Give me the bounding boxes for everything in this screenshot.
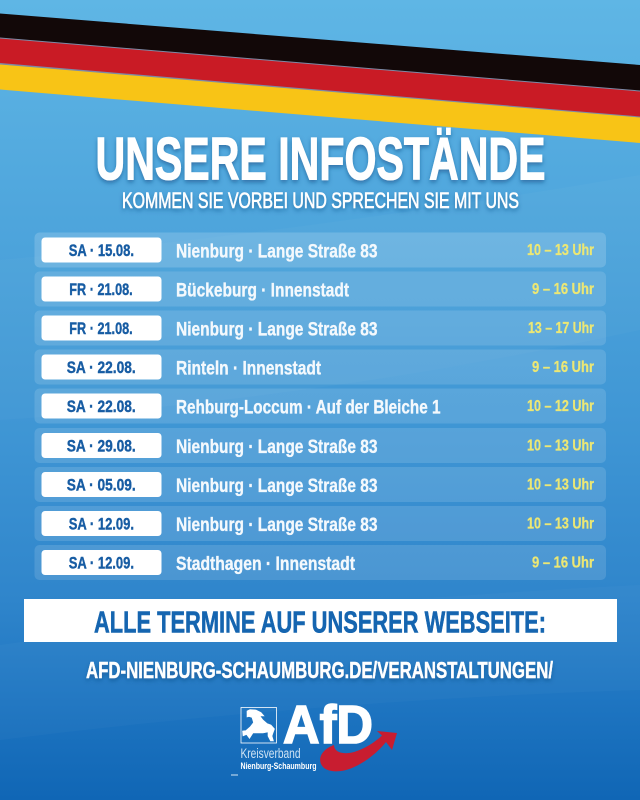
row: SA 05.09. Nienburg: Nienburg · Lange Straße 83	[176, 476, 378, 497]
logo region name: Nienburg-Schaumburg	[240, 761, 316, 771]
row: SA 05.09. Nienburg: SA · 05.09.	[67, 476, 136, 494]
row: SA 15.08. Nienburg: 10 – 13 Uhr	[527, 242, 594, 259]
row: SA 12.09. Stadthagen: SA · 12.09.	[69, 554, 134, 572]
row: FR 21.08. Nienburg: FR · 21.08.	[69, 319, 133, 338]
row: SA 15.08. Nienburg: SA · 15.08.	[69, 241, 134, 260]
row: SA 29.08. Nienburg: 10 – 13 Uhr	[527, 438, 594, 454]
row: SA 29.08. Nienburg: Nienburg · Lange Straße 83	[176, 437, 378, 458]
row: SA 22.08. Rinteln: 9 – 16 Uhr	[532, 359, 594, 376]
row: FR 21.08. Nienburg: 13 – 17 Uhr	[528, 320, 594, 337]
row: SA 15.08. Nienburg: Nienburg · Lange Straße 83	[176, 242, 378, 262]
icon: horse emblem	[241, 708, 276, 743]
website banner	[24, 599, 617, 642]
row: SA 05.09. Nienburg	[34, 467, 606, 502]
row: SA 29.08. Nienburg: SA · 29.08.	[67, 436, 136, 456]
row: SA 12.09. Stadthagen: Stadthagen · Innenstadt	[176, 554, 356, 575]
row: FR 21.08. Bückeburg: Bückeburg · Innenstadt	[176, 280, 350, 302]
row: SA 15.08. Nienburg	[34, 232, 606, 268]
icon: red swoosh arrow	[320, 731, 397, 771]
row: SA 12.09. Stadthagen	[34, 545, 606, 580]
logo wordmark: AfD	[283, 695, 373, 755]
row: SA 22.08. Rinteln: SA · 22.08.	[67, 358, 136, 377]
row: SA 12.09. Nienburg	[34, 506, 606, 541]
row: SA 22.08. Rinteln: Rinteln · Innenstadt	[176, 358, 322, 380]
row: SA 22.08. Rinteln	[34, 350, 606, 384]
logo subtitle: Kreisverband	[240, 746, 300, 761]
row: SA 12.09. Nienburg: Nienburg · Lange Straße 83	[176, 515, 378, 536]
row: FR 21.08. Nienburg	[34, 310, 606, 346]
row: FR 21.08. Bückeburg: 9 – 16 Uhr	[532, 281, 594, 298]
row: SA 12.09. Stadthagen: 9 – 16 Uhr	[532, 554, 594, 572]
row: SA 22.08. Rehburg-Loccum: Rehburg-Loccum · Auf der Bleiche 1	[176, 398, 441, 418]
row: SA 12.09. Nienburg: 10 – 13 Uhr	[527, 516, 594, 532]
row: FR 21.08. Nienburg: Nienburg · Lange Straße 83	[176, 320, 378, 340]
german flag stripes	[0, 14, 640, 143]
row: SA 22.08. Rehburg-Loccum	[34, 388, 606, 424]
row: SA 22.08. Rehburg-Loccum: SA · 22.08.	[67, 397, 136, 416]
row: FR 21.08. Bückeburg	[34, 272, 606, 306]
logo	[240, 695, 397, 771]
row: SA 22.08. Rehburg-Loccum: 10 – 12 Uhr	[527, 398, 594, 415]
row: SA 12.09. Nienburg: SA · 12.09.	[69, 514, 134, 534]
row: SA 05.09. Nienburg: 10 – 13 Uhr	[527, 476, 594, 494]
row: FR 21.08. Bückeburg: FR · 21.08.	[69, 280, 133, 299]
row: SA 29.08. Nienburg	[34, 428, 606, 463]
